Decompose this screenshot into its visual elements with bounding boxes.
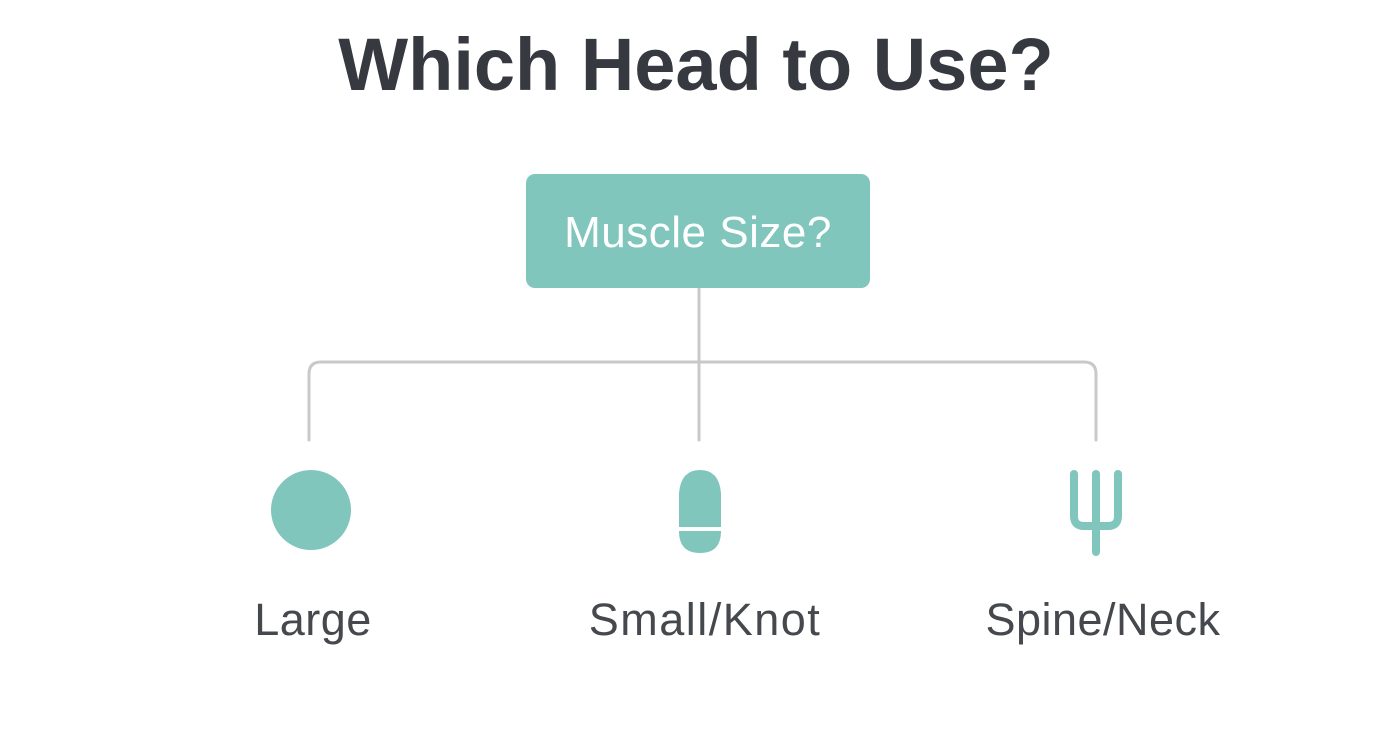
title: Which Head to Use? xyxy=(338,23,1054,106)
icon: knot xyxy=(679,470,721,553)
box: Muscle Size? xyxy=(526,174,870,288)
label: Large: Large xyxy=(254,594,372,645)
box: Muscle Size?: Muscle Size? xyxy=(564,208,832,257)
label: Small/Knot: Small/Knot xyxy=(589,594,821,645)
icon: fork xyxy=(1070,470,1122,556)
label: Spine/Neck: Spine/Neck xyxy=(985,594,1221,645)
icon: circle xyxy=(271,470,351,550)
